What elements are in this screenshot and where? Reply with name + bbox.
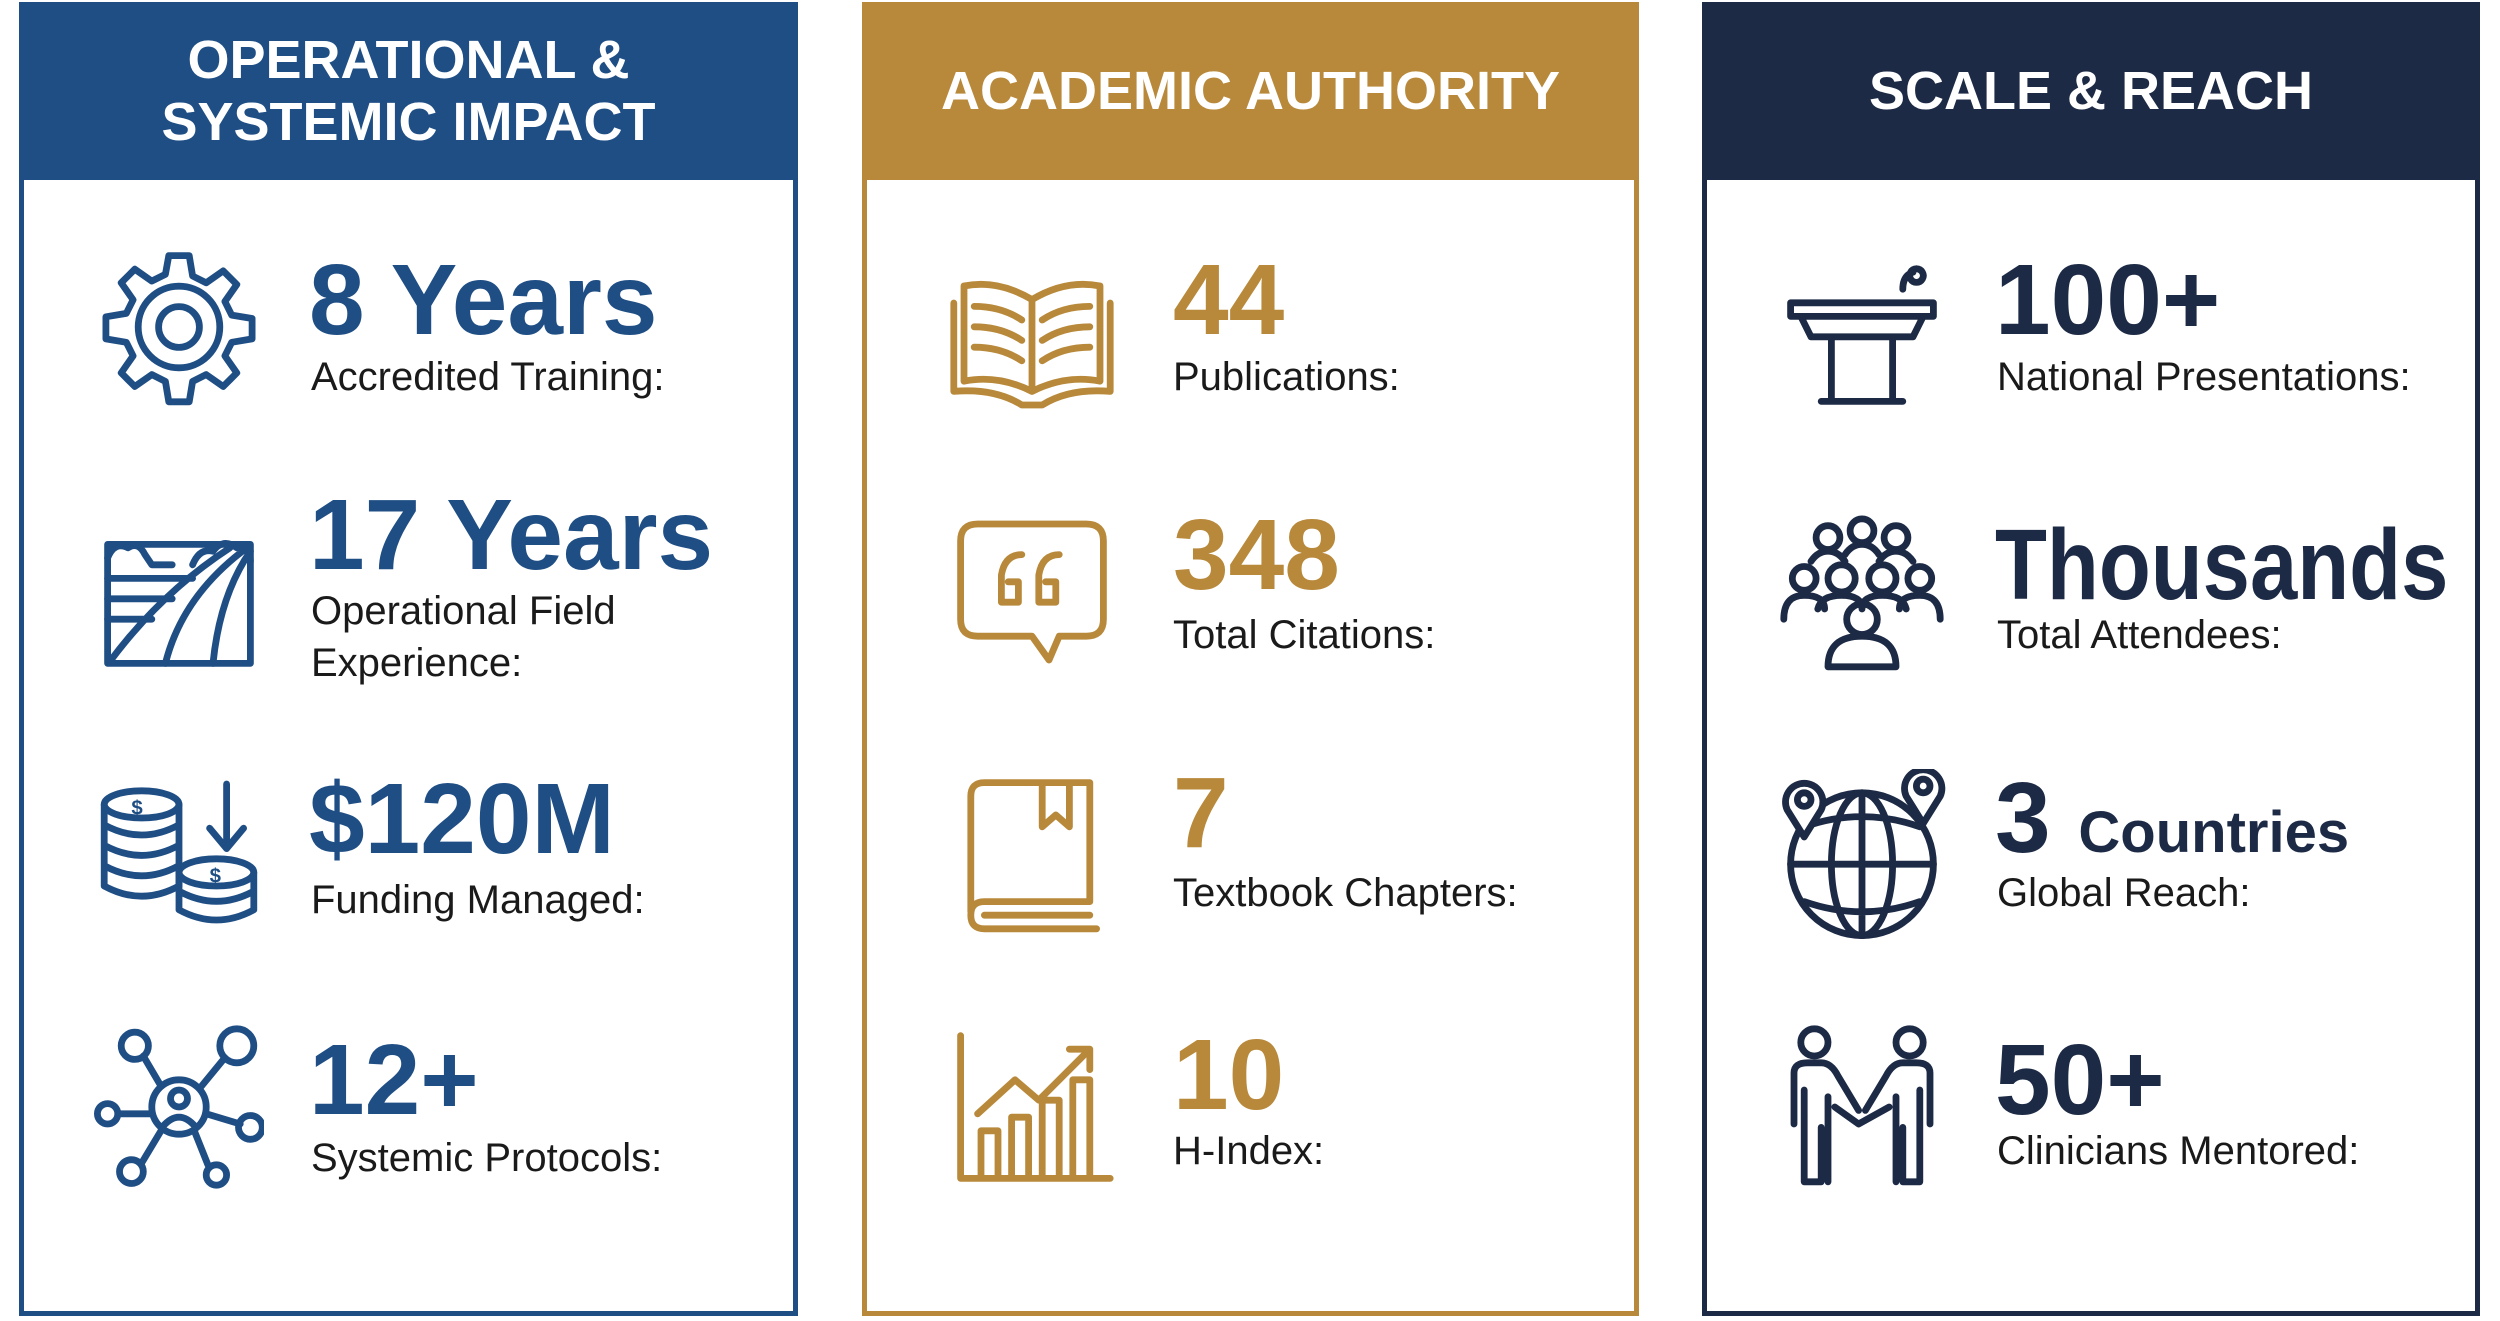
icon: globe with pins (1782, 769, 1946, 939)
label: accredited training: Accredited Training: (311, 355, 665, 399)
panel: scale & reach (1702, 2, 2480, 1316)
label: national presentations: National Presentations: (1997, 355, 2411, 399)
heading: academic authority (862, 2, 1639, 180)
icon: open book (950, 280, 1114, 408)
label: operational field experience (311, 589, 616, 685)
stat: 44: 44 (1173, 244, 1284, 356)
icon: mentoring people (1790, 1025, 1934, 1186)
stat: 10: 10 (1173, 1019, 1284, 1131)
icon: textbook (967, 779, 1100, 932)
heading: scale & reach (1702, 2, 2480, 180)
icon: coins and arrow (100, 780, 258, 924)
stat: 17 years: 17 Years (309, 479, 713, 591)
stat: 12+: 12+ (309, 1024, 479, 1136)
label: publications: Publications: (1173, 355, 1400, 399)
icon: gear (102, 252, 256, 406)
label: operational field experience: Experience: (311, 641, 522, 685)
panel: academic authority (862, 2, 1639, 1316)
stat: 50+: 50+ (1995, 1024, 2165, 1136)
stat: 100+: 100+ (1995, 244, 2220, 356)
stat: 8 years: 8 Years (309, 244, 658, 356)
heading: operational & systemic impact (19, 2, 798, 180)
label: systemic protocols: Systemic Protocols: (311, 1136, 662, 1180)
stat: 3 countries: 3 Countries (1995, 762, 2349, 874)
heading: scale & reach: SCALE & REACH (1869, 61, 2313, 121)
icon: coins and arrow: $ (131, 798, 143, 820)
label: total attendees: Total Attendees: (1997, 613, 2282, 657)
icon: crowd (1780, 516, 1944, 670)
panel: operational & systemic impact (19, 2, 798, 1316)
icon: podium (1787, 265, 1937, 405)
label: operational field experience: Operational Field (311, 589, 616, 633)
label: h-index: H-Index: (1173, 1129, 1324, 1173)
icon: quote bubble (957, 520, 1107, 664)
label: funding managed: Funding Managed: (311, 878, 645, 922)
icon: field (104, 540, 254, 667)
label: global reach: Global Reach: (1997, 871, 2250, 915)
label: clinicians mentored: Clinicians Mentored: (1997, 1129, 2359, 1173)
stat: 348: 348 (1173, 499, 1340, 611)
stat: 7: 7 (1173, 757, 1229, 869)
icon: coins and arrow: $ (210, 866, 222, 888)
stat: $120M: $120M (309, 763, 615, 875)
icon: growth chart (957, 1032, 1114, 1182)
heading: operational & systemic impact: OPERATIONAL & (187, 30, 630, 90)
stat: thousands: Thousands (1995, 509, 2448, 621)
label: total citations: Total Citations: (1173, 613, 1435, 657)
icon: network (94, 1025, 264, 1189)
heading: academic authority: ACADEMIC AUTHORITY (941, 61, 1560, 121)
label: textbook chapters: Textbook Chapters: (1173, 871, 1518, 915)
heading: operational & systemic impact: SYSTEMIC IMPACT (161, 92, 656, 152)
